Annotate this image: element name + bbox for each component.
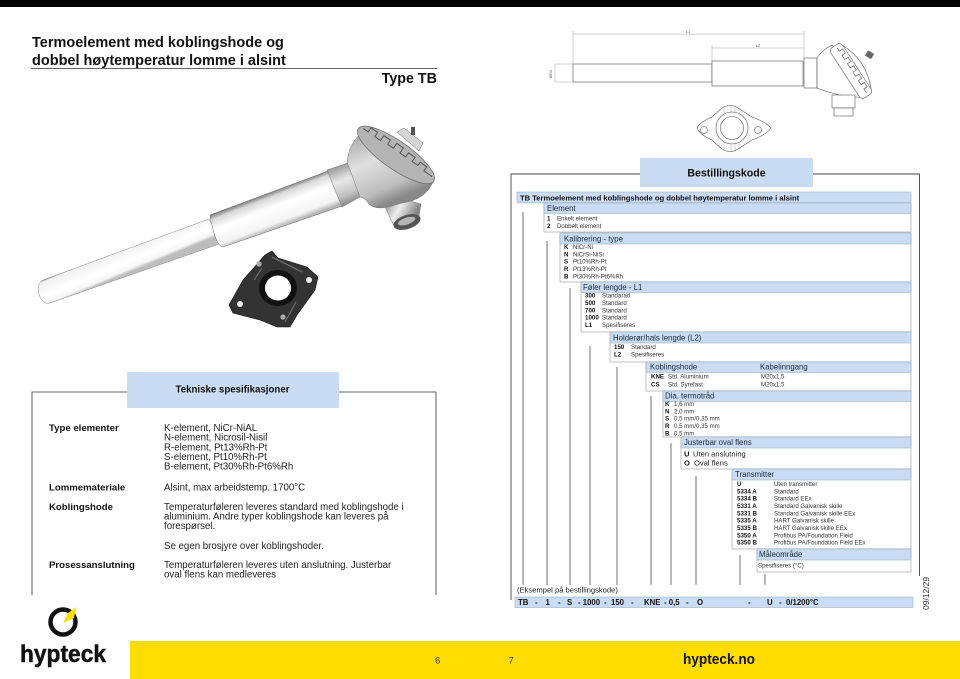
example code bar: 0/1200°C — [786, 598, 819, 607]
section: Transmitter: 5335 A — [737, 518, 757, 525]
section: Koblingshode: M20x1,5 — [761, 381, 785, 388]
section: Koblingshode: Std. Aluminium — [668, 374, 709, 381]
spec: Koblingshode: Temperaturføleren leveres standard med koblingshode i — [164, 502, 404, 513]
section: Koblingshode: Kabelinngang — [760, 362, 808, 372]
section: Transmitter: U — [737, 481, 742, 488]
example code bar: O — [697, 598, 703, 607]
example code bar: - — [558, 598, 561, 607]
spec: Type elementer: B-element, Pt30%Rh-Pt6%Rh — [164, 462, 293, 473]
section: Holderør: Holderør/hals lengde (L2) — [613, 333, 702, 342]
section: Føler lengde: 700 — [585, 307, 596, 314]
section: Føler lengde: Standard — [602, 315, 627, 322]
section: Føler lengde: Standarad — [602, 293, 630, 300]
spec: Lommemateriale: Alsint, max arbeidstemp. 1700°C — [164, 483, 305, 494]
section: Holderør: 150 — [614, 344, 625, 351]
section: Kalibrering: NiCr-Ni — [573, 244, 593, 251]
dimension lines: ØD1 — [548, 69, 553, 78]
code title bar: TB Termoelement med koblingshode og dobbel høytemperatur lomme i alsint — [520, 194, 800, 202]
section: Føler lengde: Standard — [602, 300, 627, 307]
footer band: 6 — [435, 656, 440, 666]
section: Dia. termotråd: 1,6 mm — [674, 401, 694, 408]
example code bar: 150 — [611, 598, 625, 607]
probe collar — [327, 163, 360, 207]
section: Kalibrering: S — [564, 259, 568, 266]
section: Transmitter: Standard Galvanisk skille — [774, 503, 843, 510]
spec: Lommemateriale: Lommemateriale — [49, 483, 125, 494]
section: Element: 2 — [547, 223, 551, 230]
section: Kalibrering: K — [564, 244, 569, 251]
heading: Bestillingskode: Bestillingskode — [687, 168, 766, 180]
section: Transmitter: Standard EEx — [774, 496, 812, 503]
section: Koblingshode: CS — [651, 381, 660, 388]
section: Kalibrering: Kalibrering - type — [564, 234, 623, 244]
section: Føler lengde — [581, 282, 911, 332]
section: Transmitter: Standard — [774, 488, 799, 495]
spec: Prosessanslutning: oval flens kan medleveres — [164, 570, 276, 581]
section: Føler lengde: 500 — [585, 300, 596, 307]
section: Kalibrering — [560, 233, 911, 282]
section: Transmitter: 5350 A — [737, 532, 757, 539]
section: Føler lengde: Standard — [602, 307, 627, 314]
title — [31, 35, 437, 87]
spec: Type elementer: S-element, Pt10%Rh-Pt — [164, 452, 267, 463]
order code frame — [511, 174, 920, 600]
section: Transmitter: 5334 B — [737, 496, 757, 503]
section: Dia. termotråd: S — [665, 416, 669, 423]
spec: Type elementer: N-element, Nicrosil-Nisil — [164, 433, 267, 444]
section: Kalibrering: NiCrSi-NiSi — [573, 251, 604, 258]
spec: Koblingshode — [49, 502, 404, 552]
section: Transmitter: 5350 B — [737, 540, 757, 547]
date stamp: 09/12/29 — [921, 577, 931, 610]
section: Transmitter: 5331 B — [737, 510, 757, 517]
section: Holderør: Spesifiseres — [631, 351, 664, 358]
probe holder tube — [210, 171, 342, 247]
spec: Koblingshode: Koblingshode — [49, 502, 113, 513]
dimension lines — [548, 29, 804, 86]
example code bar: - — [604, 598, 607, 607]
section: Måleområde: Måleområde — [759, 550, 802, 559]
section: Justerbar oval flens: Oval flens — [694, 459, 728, 468]
spec: Koblingshode: forespørsel. — [164, 521, 215, 532]
title: Type TB — [382, 71, 437, 87]
logo: hypteck — [20, 607, 106, 668]
section: Dia. termotråd — [663, 391, 911, 437]
panel: technical specifications — [32, 372, 436, 595]
example code bar: - — [535, 598, 538, 607]
spec frame — [32, 392, 436, 595]
section: Dia. termotråd: Dia. termotråd — [665, 392, 714, 400]
section: Transmitter: Profibus PA/Foundation Field — [774, 532, 853, 539]
example code bar: - — [779, 598, 782, 607]
section: Justerbar oval flens — [681, 437, 911, 469]
probe thin tube — [38, 219, 222, 303]
footer band: 7 — [508, 656, 514, 666]
illustration: oval flange — [229, 251, 318, 327]
section: Element: 1 — [547, 216, 551, 223]
section: Måleområde — [757, 549, 911, 572]
spec: Type elementer: R-element, Pt13%Rh-Pt — [164, 442, 268, 453]
section: Transmitter: Standard Galvanisk skille EEx — [774, 510, 855, 517]
section: Føler lengde: 1000 — [585, 315, 599, 322]
technical drawing: probe with dimensions — [548, 29, 878, 116]
section: Dia. termotråd: K — [665, 401, 670, 408]
example code bar: - — [748, 598, 751, 607]
section: Kalibrering: Pt10%Rh-Pt — [573, 259, 607, 266]
section: Dia. termotråd: N — [665, 408, 670, 415]
section: Føler lengde: L1 — [585, 322, 593, 329]
section: Justerbar oval flens: O — [684, 459, 690, 468]
panel: order code — [511, 158, 920, 608]
probe terminal plate — [397, 127, 423, 151]
section: Dia. termotråd: 0,5 mm/0,35 mm — [674, 423, 720, 430]
example code bar — [515, 597, 913, 608]
section: Dia. termotråd: 2,0 mm — [674, 408, 694, 415]
spec: Type elementer — [49, 423, 293, 473]
heading: Tekniske spesifikasjoner: Tekniske spesifikasjoner — [176, 384, 290, 396]
section: Holderør: Standard — [631, 344, 656, 351]
example code bar: - 0,5 — [664, 598, 680, 607]
spec: Type elementer: K-element, NiCr-NiAL — [164, 423, 258, 434]
example code bar: U — [767, 598, 773, 607]
example caption: (Eksempel på bestillingskode) — [517, 586, 618, 594]
probe lid ring — [350, 117, 442, 193]
probe head body — [347, 131, 433, 208]
section: Transmitter: HART Galvanisk skille — [774, 518, 835, 525]
section: Føler lengde: Spesifiseres — [602, 322, 635, 329]
example code bar: - — [686, 598, 689, 607]
section: Justerbar oval flens: U — [684, 449, 690, 458]
code title bar — [517, 192, 911, 203]
section: Justerbar oval flens: Uten anslutning — [693, 449, 746, 458]
dimension lines: L1 — [686, 29, 691, 34]
section: Kalibrering: N — [564, 251, 569, 258]
drawing tubes — [573, 58, 817, 88]
section: Koblingshode: M20x1,5 — [761, 374, 785, 381]
heading: Bestillingskode — [640, 158, 813, 187]
section: Element — [544, 203, 911, 232]
section: Transmitter — [732, 469, 911, 549]
section: Element: Dobbelt element — [557, 223, 602, 230]
example code bar: 1 — [546, 598, 550, 607]
spec: Lommemateriale — [49, 483, 305, 494]
section: Måleområde: Spesifiseres (°C) — [758, 563, 804, 570]
section: Føler lengde: 300 — [585, 293, 596, 300]
section: Dia. termotråd: B — [665, 430, 670, 437]
example code bar: S — [567, 598, 572, 607]
title: dobbel høytemperatur lomme i alsint — [32, 53, 286, 69]
example code bar: - — [631, 598, 634, 607]
spec: Prosessanslutning — [49, 560, 392, 581]
section: Holderør — [610, 332, 911, 362]
heading: Tekniske spesifikasjoner — [127, 372, 339, 408]
top black bar — [0, 0, 960, 7]
section: Justerbar oval flens: Justerbar oval flens — [684, 438, 752, 447]
section: Dia. termotråd: 0,5 mm/0,35 mm — [674, 416, 720, 423]
section: Koblingshode: KNE — [651, 374, 664, 381]
example code bar: KNE — [644, 598, 660, 607]
section: Koblingshode: Std. Syrefast — [668, 381, 703, 388]
spec: Prosessanslutning: Prosessanslutning — [49, 560, 135, 571]
illustration: thermocouple probe — [38, 117, 442, 303]
section: Kalibrering: Pt30%Rh-Pt6%Rh — [573, 273, 623, 280]
probe gland — [384, 196, 421, 228]
section: Transmitter: 5335 B — [737, 525, 757, 532]
section: Dia. termotråd: 0,5 mm — [674, 430, 694, 437]
spec: Koblingshode: aluminium. Andre typer koblingshode kan leveres på — [164, 512, 389, 523]
section: Transmitter: Transmitter — [735, 470, 775, 479]
section: Dia. termotråd: R — [665, 423, 670, 430]
section: Kalibrering: B — [564, 273, 569, 280]
section: Koblingshode — [646, 362, 911, 391]
logo: hypteck: hypteck — [20, 641, 106, 668]
section: Kalibrering: R — [564, 266, 569, 273]
dimension lines: ØD2 — [751, 69, 756, 78]
dimension lines: L2 — [756, 43, 761, 48]
section: Føler lengde: Føler lengde - L1 — [583, 283, 642, 292]
example code bar: - 1000 — [578, 598, 601, 607]
technical drawing: flange top view — [697, 105, 771, 152]
section: Transmitter: Uten transmitter — [774, 481, 817, 488]
drawing head — [817, 39, 878, 116]
section: Koblingshode: Koblingshode — [650, 362, 697, 372]
section: Element: Enkelt element — [557, 216, 598, 223]
section: Kalibrering: Pt13%Rh-Pt — [573, 266, 607, 273]
section: Transmitter: Profibus PA/Foundation Field EEx — [774, 540, 866, 547]
footer band: hypteck.no — [683, 652, 755, 668]
section: Element: Element — [547, 204, 576, 213]
example code bar: TB — [518, 598, 529, 607]
section: Holderør: L2 — [614, 351, 622, 358]
probe cable nut — [392, 211, 422, 233]
connector lines — [523, 212, 765, 585]
spec: Type elementer: Type elementer — [49, 423, 119, 434]
title: Termoelement med koblingshode og — [32, 35, 284, 51]
spec: Prosessanslutning: Temperaturføleren leveres uten anslutning. Justerbar — [164, 560, 392, 571]
footer band — [130, 641, 960, 679]
section: Transmitter: 5331 A — [737, 503, 757, 510]
section: Transmitter: 5334 A — [737, 488, 757, 495]
section: Transmitter: HART Galvanisk skille EEx — [774, 525, 847, 532]
spec: Koblingshode: Se egen brosjyre over koblingshoder. — [164, 541, 324, 552]
